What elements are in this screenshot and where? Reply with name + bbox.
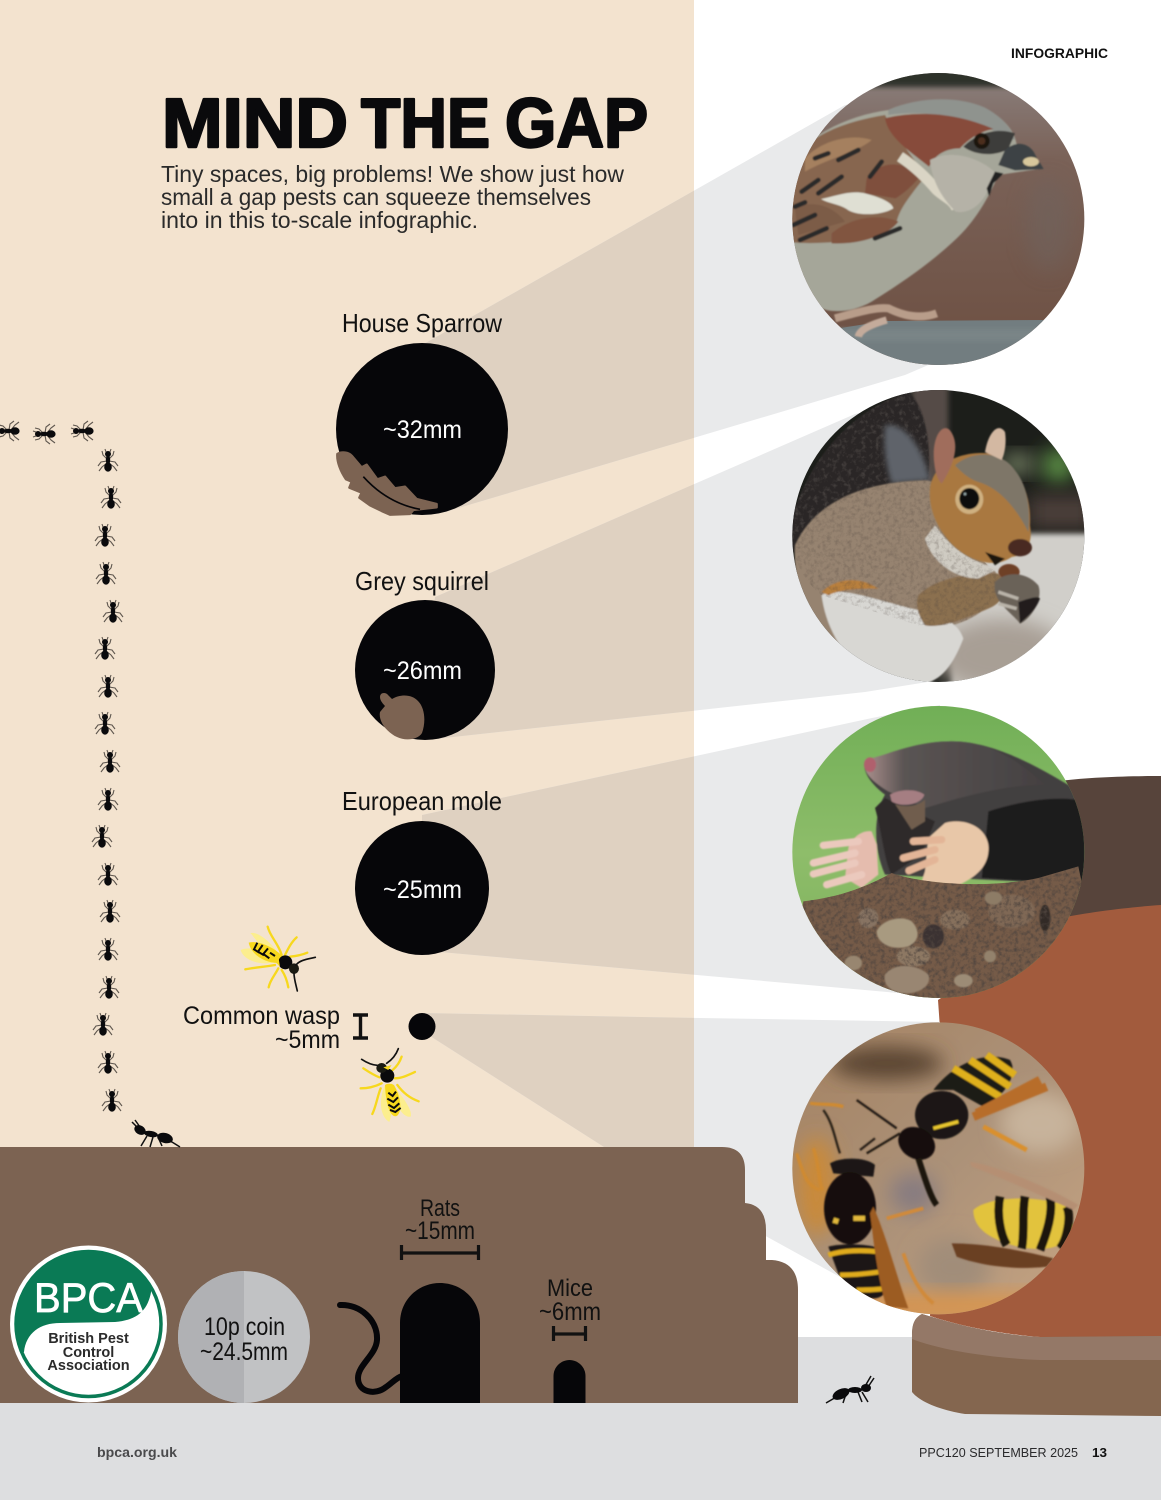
marching ants: vertical column [92,449,123,1112]
left wasp [830,1159,875,1177]
10p coin: 10p coin [204,1313,285,1341]
brown wall with stepped skirting [0,1147,798,1403]
icon: acorn [380,693,424,739]
footer: website: bpca.org.uk [97,1445,178,1460]
logo: BPCA: Control [63,1345,114,1361]
10p coin [178,1271,310,1403]
flower pot saucer [912,1314,1161,1416]
panel: house sparrow gap: ~32mm [383,416,462,444]
mole paws [922,821,989,885]
panel: common wasp gap: Common wasp [183,1002,340,1030]
rat tail [340,1305,402,1392]
marching ants: top row [0,421,94,444]
title: MIND [162,84,348,162]
photo: house sparrow [792,73,1084,365]
rat hole shape [400,1283,480,1403]
mouse hole shape [554,1360,586,1403]
panel: common wasp gap [183,1002,436,1054]
flower pot: terracotta body [930,905,1161,1338]
panel: grey squirrel gap [355,566,495,740]
panel: mouse hole [539,1275,601,1403]
intro text: Tiny spaces, big problems! We show just how [161,161,625,187]
panel: european mole gap [342,786,502,955]
sight lines from gaps to photos (white side) [422,90,940,1300]
measure bar [552,1326,587,1341]
panel: house sparrow gap: House Sparrow [342,308,502,338]
icon: ant on wall [132,1120,180,1147]
panel: rat hole: ~15mm [405,1217,475,1245]
title: GAP [505,84,648,162]
photo: european mole [792,706,1084,998]
panel: mouse hole: ~6mm [539,1298,601,1326]
intro text [161,161,625,233]
panel: european mole gap: ~25mm [383,876,462,904]
panel: grey squirrel gap: Grey squirrel [355,566,489,596]
measure bar [400,1245,480,1260]
grey floor strip [0,1337,1161,1500]
header label: INFOGRAPHIC [1011,46,1108,61]
panel: grey squirrel gap: ~26mm [383,657,462,685]
logo: BPCA [0,1240,170,1402]
panel: house sparrow gap [336,308,508,515]
footer: issue details: PPC120 SEPTEMBER 2025 [919,1445,1078,1460]
title: THE [361,84,490,162]
right wasp [973,1198,1073,1249]
perch [841,320,1044,365]
icon: wasp upper [241,927,315,991]
logo: BPCA: Association [47,1358,130,1374]
top wasp [933,1057,1013,1107]
intro text: small a gap pests can squeeze themselves [161,184,591,210]
panel: rat hole [340,1195,480,1403]
title [162,84,648,162]
icon: wasp lower [361,1049,419,1122]
footer: issue details: 13 [1092,1445,1107,1460]
measure bar [353,1015,368,1038]
panel: mouse hole: Mice [547,1275,593,1302]
photo: common wasps [790,1020,1087,1320]
panel: rat hole: Rats [420,1195,460,1222]
sight lines from gaps to photos (beige side) [422,190,694,1147]
flower pot: dark rim [1060,776,1161,920]
panel: common wasp gap: ~5mm [275,1026,340,1054]
10p coin: ~24.5mm [200,1338,288,1366]
icon: ant on floor [826,1376,874,1403]
logo: BPCA: British Pest [48,1331,129,1347]
intro text: into in this to-scale infographic. [161,207,478,233]
panel: european mole gap: European mole [342,786,502,816]
icon: feather [337,452,437,515]
logo: BPCA: BPCA [34,1274,143,1321]
photo: grey squirrel [792,390,1084,682]
